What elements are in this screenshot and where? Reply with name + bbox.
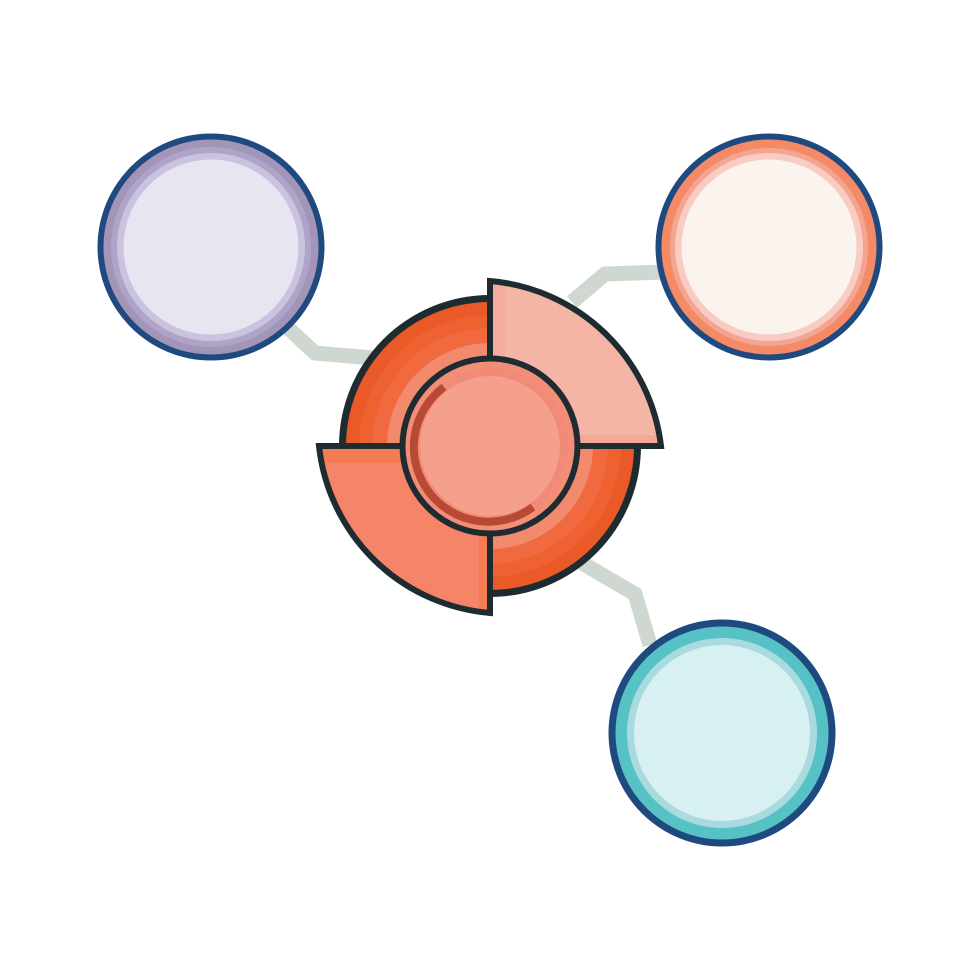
- node: purple circle: [98, 134, 324, 360]
- node: orange circle: [656, 134, 882, 360]
- node: teal circle: [608, 620, 836, 846]
- hub: dark arc accent: [414, 387, 533, 522]
- connector: hub to orange node: [572, 272, 664, 302]
- connector: hub to purple node: [288, 328, 372, 358]
- connector: hub to teal node: [582, 563, 650, 645]
- infographic: hub and three nodes: [98, 134, 882, 846]
- hub: dark base ring with banded orange: [339, 295, 641, 597]
- hub: coral quarter segment: [315, 446, 490, 616]
- hub: [315, 281, 665, 616]
- hub: light pink quarter segment: [490, 281, 665, 446]
- hub: inner circle: [402, 358, 578, 534]
